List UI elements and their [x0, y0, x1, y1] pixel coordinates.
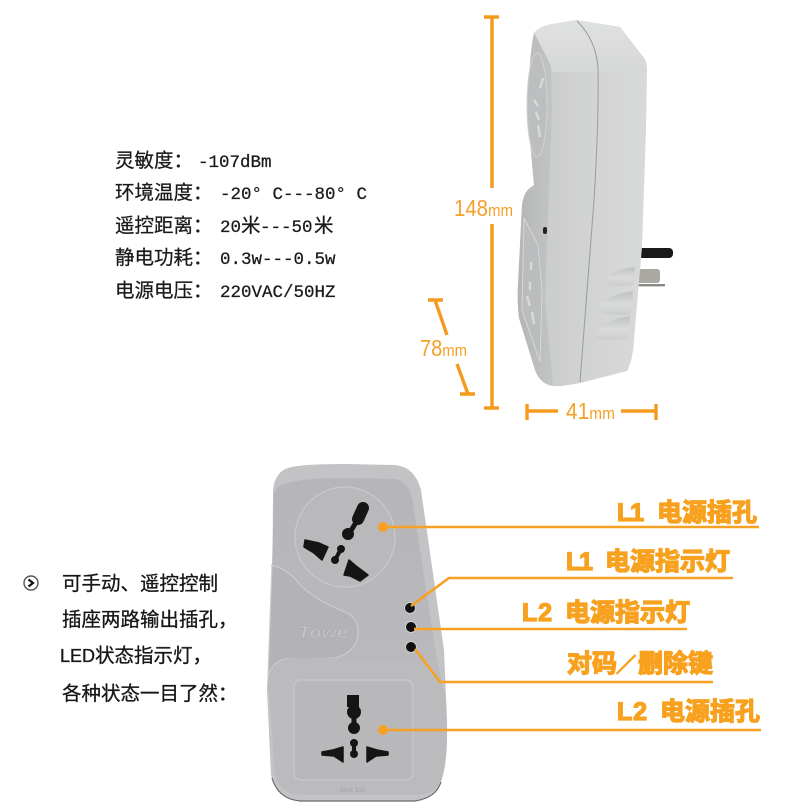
callout: L2 socket — [378, 698, 761, 735]
spec: remote distance: 遥控距离： — [115, 215, 213, 237]
side view of device — [518, 20, 673, 386]
spec: sensitivity: 灵敏度： — [115, 150, 193, 172]
spec: temperature: -20° C---80° C — [220, 185, 367, 205]
socket: upper round — [295, 487, 395, 587]
feature description — [60, 573, 238, 705]
spec: supply voltage: 电源电压： — [115, 280, 213, 302]
callout: L1 socket: L1 — [617, 499, 644, 527]
dimension: 78mm — [420, 300, 475, 394]
spec: remote distance: ---50 — [260, 218, 313, 238]
front body shell — [267, 464, 447, 801]
spec: remote distance: 米 — [314, 215, 334, 237]
rating mark: MAX 10A — [340, 788, 365, 794]
spec: remote distance: 20 — [220, 218, 241, 238]
callout: L2 indicator — [414, 599, 690, 629]
socket relief top — [527, 53, 547, 157]
spec: supply voltage: 220VAC/50HZ — [220, 283, 336, 303]
spec list — [115, 150, 367, 303]
icon: bullet arrow — [24, 576, 38, 590]
callout: L2 indicator: 电源指示灯 — [565, 599, 690, 627]
spec: temperature: 环境温度： — [115, 182, 213, 204]
icon: plug prongs — [636, 248, 673, 286]
top bevel — [534, 20, 647, 72]
callout: L1 indicator — [411, 548, 733, 606]
socket: lower square — [294, 680, 413, 780]
socket relief bottom — [522, 218, 542, 362]
dimension: 41mm — [527, 398, 656, 424]
callout: L2 indicator: L2 — [522, 599, 552, 627]
callout: pair and delete key: 对码 — [567, 650, 617, 678]
dimension: 78mm: 78mm — [420, 335, 467, 361]
callout: pair and delete key — [415, 649, 713, 682]
dimension: 148mm: 148mm — [454, 195, 513, 221]
front face strip — [518, 33, 553, 386]
feature description: LED状态指示灯， — [60, 645, 212, 667]
recessed band — [268, 565, 358, 677]
spec: standby power: 静电功耗： — [115, 247, 213, 269]
indicator LEDs — [404, 602, 416, 652]
grip ridges — [596, 267, 635, 340]
pairing pinhole — [543, 227, 547, 234]
callout: L2 socket: 电源插孔 — [660, 698, 760, 726]
brand logo: Towe — [298, 623, 348, 642]
dimension: 41mm: 41mm — [566, 398, 615, 424]
callout: L1 socket — [378, 499, 759, 532]
callout: pair and delete key: 删除键 — [638, 649, 713, 678]
callout: L2 socket: L2 — [617, 698, 647, 726]
spec: standby power: 0.3w---0.5w — [220, 250, 336, 270]
spec: sensitivity: -107dBm — [198, 153, 272, 173]
bottom shadow edge — [272, 778, 441, 801]
lower plate — [268, 658, 447, 795]
dimension: 148mm — [454, 17, 513, 408]
seam line — [577, 21, 598, 382]
callout: L1 socket: 电源插孔 — [657, 499, 757, 527]
callout: L1 indicator: L1 — [566, 548, 593, 576]
callout: L1 indicator: 电源指示灯 — [605, 548, 730, 576]
front view of device — [267, 464, 447, 801]
callout: pair and delete key: ／ — [616, 655, 636, 677]
feature description: 插座两路输出插孔， — [62, 609, 238, 631]
feature description: 可手动、遥控控制 — [62, 573, 218, 595]
spec: remote distance: 米 — [241, 215, 261, 237]
upper plate — [272, 478, 437, 660]
side body shell — [518, 20, 647, 386]
feature description: 各种状态一目了然： — [62, 683, 238, 705]
